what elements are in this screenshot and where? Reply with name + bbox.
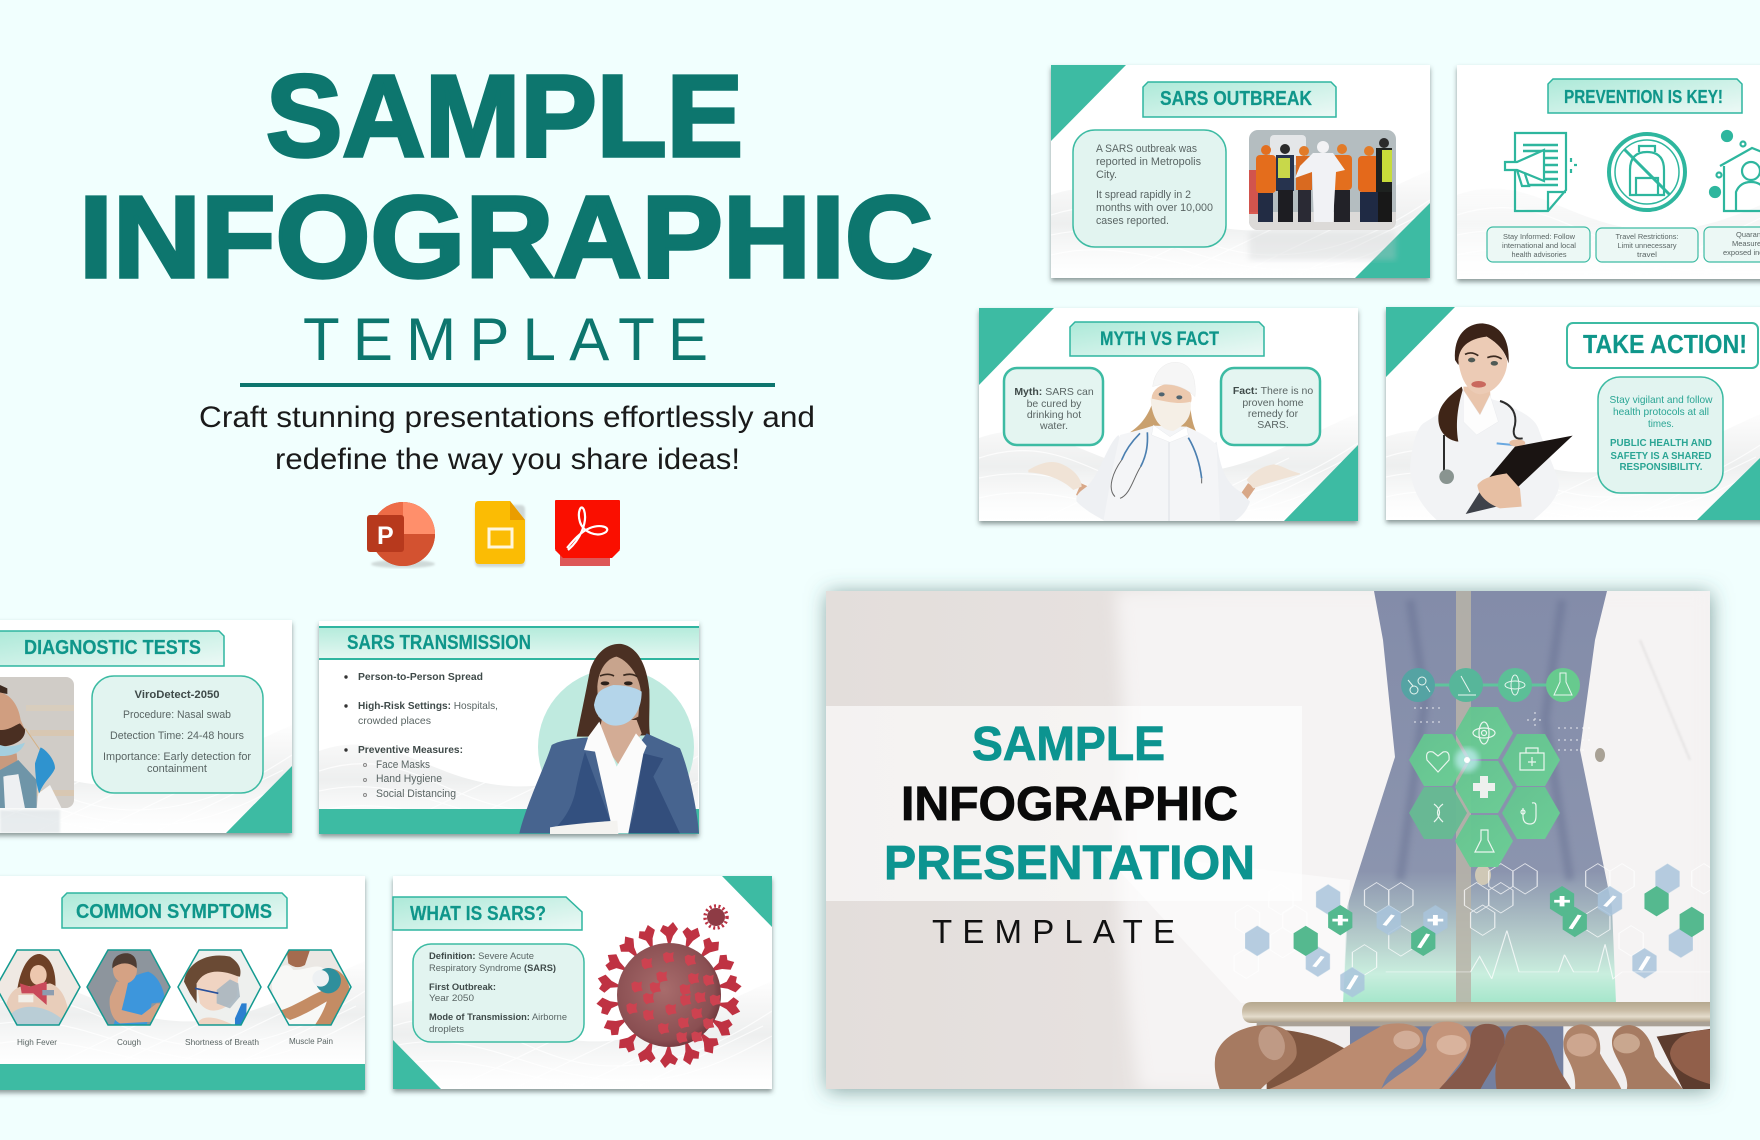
caption: travel restrictions: travel	[1637, 250, 1657, 259]
info card: ViroDetect-2050	[134, 689, 220, 701]
icon: google slides	[475, 501, 525, 567]
dots and crosses	[1414, 708, 1594, 750]
symptom: muscle pain: Muscle Pain	[289, 1036, 333, 1046]
caption: quarantine	[1704, 227, 1760, 262]
caption: travel restrictions	[1596, 228, 1698, 262]
title banner: WHAT IS SARS?	[410, 903, 546, 925]
caption: travel restrictions: Travel Restrictions:	[1616, 232, 1678, 241]
call to action card: health protocols at all	[1613, 406, 1709, 418]
text box: A SARS outbreak was	[1096, 143, 1197, 155]
heading: infographic: INFOGRAPHIC	[79, 172, 933, 302]
illustration: virus	[596, 906, 742, 1068]
title banner	[1548, 79, 1742, 113]
text box: months with over 10,000	[1096, 202, 1213, 214]
icon: megaphone document	[1505, 133, 1577, 211]
title banner: DIAGNOSTIC TESTS	[24, 637, 201, 659]
slide: take action	[1386, 307, 1760, 520]
tablet	[1242, 1002, 1711, 1023]
definition card: Respiratory Syndrome (SARS)	[429, 963, 556, 973]
info card: containment	[147, 763, 207, 775]
fact card: Fact: There is no	[1233, 385, 1313, 397]
heading: presentation: PRESENTATION	[884, 837, 1255, 890]
title banner: PREVENTION IS KEY!	[1564, 87, 1723, 107]
photo: nurse shrugging	[1028, 362, 1300, 522]
footer band	[0, 1064, 365, 1090]
heading: template: TEMPLATE	[932, 913, 1175, 950]
hologram small hexagon network	[1234, 864, 1716, 997]
text box	[1073, 130, 1226, 247]
heading: template: TEMPLATE	[303, 306, 708, 373]
symptom: high fever	[0, 950, 80, 1047]
title banner: MYTH VS FACT	[1100, 329, 1219, 350]
myth card: water.	[1039, 420, 1068, 432]
symptom: cough	[85, 950, 172, 1047]
definition card: Year 2050	[429, 993, 474, 1003]
call to action card: times.	[1648, 418, 1674, 430]
symptom: shortness of breath: Shortness of Breath	[185, 1037, 259, 1047]
slide: diagnostic tests	[0, 620, 292, 833]
footer band	[319, 809, 699, 834]
definition card: Definition: Severe Acute	[429, 951, 534, 961]
photo: doctor with clipboard	[1410, 323, 1573, 520]
myth card: drinking hot	[1027, 409, 1081, 421]
fact card: proven home	[1242, 397, 1304, 409]
bullet list: crowded places	[358, 715, 431, 727]
title banner	[62, 893, 287, 928]
caption: stay informed: health advisories	[1512, 250, 1567, 259]
slide: prevention is key	[1457, 65, 1760, 279]
caption: stay informed: Stay Informed: Follow	[1503, 232, 1576, 241]
text box: It spread rapidly in 2	[1096, 189, 1191, 201]
tagline line one: Craft stunning presentations effortlessly and	[199, 401, 815, 434]
heading: infographic: INFOGRAPHIC	[901, 778, 1238, 831]
bullet list: High-Risk Settings: Hospitals,	[358, 700, 498, 712]
text box: City.	[1096, 169, 1117, 181]
divider under heading	[240, 383, 775, 387]
call to action card: Stay vigilant and follow	[1610, 394, 1713, 406]
light beam	[1343, 901, 1349, 1000]
main title block	[79, 51, 933, 476]
icon: pdf	[555, 500, 620, 566]
definition card: droplets	[429, 1024, 464, 1034]
title banner	[393, 897, 582, 930]
mint circle	[538, 674, 694, 776]
symptom: high fever: High Fever	[17, 1037, 57, 1047]
text box: cases reported.	[1096, 215, 1169, 227]
scrubs	[1343, 591, 1616, 1003]
header band	[319, 626, 699, 660]
title banner	[1567, 323, 1758, 368]
coat	[1116, 591, 1214, 1088]
medical hexagon cluster	[1409, 707, 1560, 867]
bullet list: Preventive Measures:	[358, 744, 463, 756]
photo: response team	[1249, 130, 1396, 260]
definition card: Mode of Transmission: Airborne	[429, 1012, 567, 1022]
slide: sars outbreak	[1051, 65, 1430, 278]
icon: no travel sign	[1609, 134, 1685, 210]
slide: sars transmission	[319, 621, 699, 834]
title banner	[1070, 322, 1264, 356]
icon: powerpoint	[367, 502, 435, 568]
caption: stay informed	[1487, 227, 1590, 262]
call to action card: PUBLIC HEALTH AND	[1610, 437, 1712, 449]
title banner	[1143, 82, 1336, 117]
heading: sample: SAMPLE	[972, 718, 1165, 771]
tagline line two: redefine the way you share ideas!	[275, 443, 740, 476]
fact card: remedy for	[1248, 408, 1299, 420]
symptom: cough: Cough	[117, 1037, 141, 1047]
photo: nasal swab	[0, 677, 74, 833]
info card: Procedure: Nasal swab	[123, 709, 231, 721]
slide: hero presentation cover	[826, 591, 1716, 1090]
info card: Importance: Early detection for	[103, 751, 251, 763]
call to action card: SAFETY IS A SHARED	[1610, 450, 1712, 462]
slide: myth vs fact	[979, 308, 1358, 522]
fact card	[1221, 368, 1320, 445]
hands	[1215, 1022, 1713, 1090]
icon: quarantine house	[1710, 131, 1760, 211]
heading: sample: SAMPLE	[266, 51, 743, 181]
slide: what is sars	[393, 876, 772, 1089]
info card: Detection Time: 24-48 hours	[110, 730, 244, 742]
bullet list	[344, 671, 498, 800]
bullet list: Social Distancing	[376, 788, 456, 800]
connected circle icons	[1401, 668, 1580, 702]
call to action card: RESPONSIBILITY.	[1620, 461, 1703, 473]
definition card: First Outbreak:	[429, 982, 496, 992]
caption: stay informed: international and local	[1502, 241, 1576, 250]
fact card: SARS.	[1257, 419, 1289, 431]
caption: travel restrictions: Limit unnecessary	[1618, 241, 1677, 250]
bullet list: Face Masks	[376, 759, 430, 771]
translucent title panel	[826, 706, 1136, 901]
bullet list: Hand Hygiene	[376, 773, 442, 785]
title banner: COMMON SYMPTOMS	[76, 901, 272, 923]
bullet list: Person-to-Person Spread	[358, 671, 483, 683]
title: SARS TRANSMISSION	[347, 632, 531, 654]
title banner	[0, 631, 224, 666]
info card	[92, 676, 263, 793]
photo: masked woman	[519, 644, 699, 834]
icon: powerpoint: P	[377, 522, 394, 550]
slide: common symptoms	[0, 876, 365, 1090]
definition card	[413, 944, 584, 1042]
symptom: muscle pain	[267, 950, 353, 1046]
title banner: SARS OUTBREAK	[1160, 88, 1312, 110]
myth card: Myth: SARS can	[1014, 386, 1094, 398]
call to action card	[1598, 377, 1723, 493]
text box: reported in Metropolis	[1096, 156, 1201, 168]
myth card	[1004, 368, 1103, 445]
myth card: be cured by	[1027, 398, 1082, 410]
symptom: shortness of breath	[177, 950, 263, 1047]
